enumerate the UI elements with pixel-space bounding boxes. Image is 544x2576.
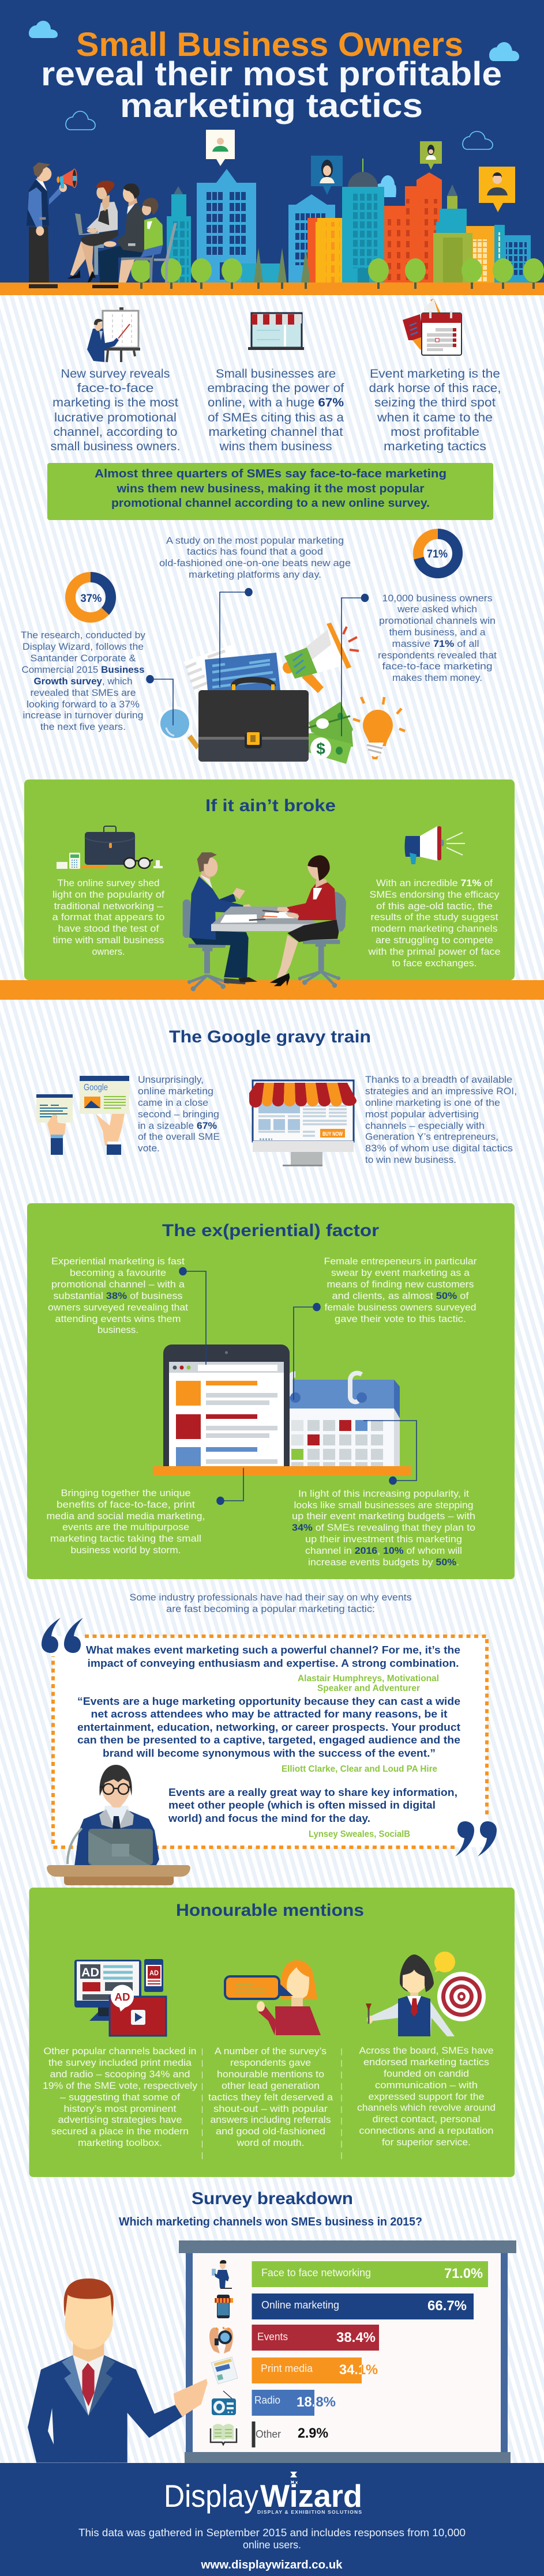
icon: hands with camera xyxy=(209,2327,233,2353)
text: experiential note: substantial 38% of business xyxy=(53,1291,182,1301)
text: research note: The research, conducted by xyxy=(21,630,146,641)
text: research note: Commercial 2015 Business xyxy=(21,665,144,675)
bar: face to face networking xyxy=(252,2261,488,2287)
icon: hand holding Google page xyxy=(80,1076,129,1155)
text: column 3 xyxy=(369,367,501,453)
panel: industry quotes xyxy=(42,1618,497,1885)
text: column 3: most profitable xyxy=(391,425,479,439)
text: right note: of this age-old tactic, the xyxy=(376,901,493,912)
quote 3: meet other people (which is often missed in digital xyxy=(168,1799,436,1811)
quote 2: can then be presented to a captive, targeted, engaged audience and the xyxy=(77,1734,460,1746)
quote 2: entertainment, education, networking, or career prospects. Your product xyxy=(77,1721,460,1733)
audience and speaker illustration xyxy=(27,163,177,292)
text: budget note: looks like small businesses are stepping xyxy=(294,1500,473,1511)
icon: woman with speech bubble xyxy=(225,1960,321,2035)
intro column 2 xyxy=(208,313,344,453)
text: left note: time with small business xyxy=(53,935,164,946)
text: online marketing note: Unsurprisingly, xyxy=(138,1075,204,1085)
bar: radio: Radio xyxy=(254,2394,280,2406)
speech bubble: blue profile xyxy=(311,156,343,195)
icon: megaphone xyxy=(405,826,465,864)
text: multipurpose note: events are the multipurpose xyxy=(62,1522,189,1532)
heading: The ex(periential) factor xyxy=(162,1221,379,1240)
text: multipurpose note: Bringing together the unique xyxy=(61,1488,190,1498)
icon: woman with target xyxy=(366,1952,486,2036)
text: quotes intro xyxy=(129,1592,412,1614)
icon: open book xyxy=(211,2424,237,2445)
connector: owners to banknotes xyxy=(342,594,368,736)
connector: shelf to multipurpose note xyxy=(217,1468,243,1505)
right teal and blue buildings xyxy=(494,225,531,283)
text: column 1: small business owners. xyxy=(51,440,180,453)
icon: advertising screens: AD xyxy=(81,1966,99,1979)
text: channels note: the survey included print media xyxy=(48,2058,192,2068)
quote 1: Alastair Humphreys, Motivational xyxy=(298,1674,439,1684)
text: data source: online users. xyxy=(243,2539,301,2551)
text: budget note: up their investment this marketing xyxy=(305,1534,462,1545)
text: candid communication note: Across the board, SMEs have xyxy=(359,2046,494,2056)
green summary banner: wins them new business, making it the most popular xyxy=(116,482,425,495)
icon: advertising screens: AD xyxy=(114,1991,130,2003)
icon: man with phone xyxy=(212,2260,232,2289)
title: Small Business Owners xyxy=(76,26,463,63)
logo: DISPLAY & EXHIBITION SOLUTIONS xyxy=(257,2509,362,2515)
bar chart: marketing channels xyxy=(252,2261,488,2447)
text: 10,000 owners note: massive 71% of all xyxy=(392,639,479,649)
text: multipurpose note: marketing tactic taking the small xyxy=(50,1534,201,1544)
text: 10,000 owners note xyxy=(378,593,497,683)
icon: shop phone xyxy=(215,2295,233,2318)
text: multipurpose note: business world by storm. xyxy=(70,1545,181,1556)
bar: events: Events xyxy=(257,2331,288,2342)
text: advertising note: most popular advertising xyxy=(365,1109,479,1120)
text: research note: Display Wizard, follows the xyxy=(22,642,144,652)
icon: blue document xyxy=(205,653,280,690)
text: experiential note: promotional channel – with a xyxy=(51,1279,185,1290)
text: candid communication note: channels which revolve around xyxy=(357,2103,496,2113)
bar: print media xyxy=(252,2357,378,2383)
illustration: tablet xyxy=(163,1345,290,1466)
logo: Display xyxy=(164,2478,258,2514)
text: experiential note: owners surveyed revealing that xyxy=(48,1302,188,1313)
text: candid communication note: endorsed marketing tactics xyxy=(363,2057,489,2067)
icon: advertising screens xyxy=(74,1959,166,2036)
text: study intro: tactics has found that a good xyxy=(187,547,323,557)
text: study intro: old-fashioned one-on-one beats new age xyxy=(159,558,351,568)
logo xyxy=(164,2472,362,2515)
text: website: www.displaywizard.co.uk xyxy=(200,2559,343,2571)
bar: print media: 34.1% xyxy=(339,2362,378,2378)
text: online marketing note xyxy=(138,1075,220,1154)
text: column 3: Event marketing is the xyxy=(370,367,500,381)
donut chart 37% xyxy=(70,577,111,617)
text: word of mouth note: answers including referrals xyxy=(210,2115,331,2125)
bar: radio: 18.8% xyxy=(297,2394,336,2410)
text: column 1: New survey reveals xyxy=(61,367,170,381)
city skyline xyxy=(131,159,544,289)
text: word of mouth note: shout-out – with popular xyxy=(213,2104,328,2114)
text: 10,000 owners note: them business, and a xyxy=(389,627,486,638)
quote 1: What makes event marketing such a powerful channel? For me, it’s the xyxy=(86,1644,460,1656)
text: word of mouth note: tactics they felt deserved a xyxy=(208,2092,333,2103)
text: left note: The online survey shed xyxy=(58,878,159,888)
text: column 3: marketing tactics xyxy=(384,440,486,453)
icon: hand holding Google page: Google xyxy=(84,1083,108,1093)
quote 2: “Events are a huge marketing opportunity because they can cast a wide xyxy=(77,1695,460,1707)
intro column 1 xyxy=(51,307,180,453)
text: multipurpose note: benefits of face-to-face, print xyxy=(57,1500,195,1510)
text: research note: Santander Corporate & xyxy=(30,653,136,664)
text: channels note xyxy=(43,2046,198,2148)
closing quotation mark xyxy=(455,1821,497,1856)
man in grey jacket xyxy=(91,183,145,289)
section: the Google gravy train xyxy=(36,1027,517,1166)
text: advertising note: strategies and an impressive ROI, xyxy=(365,1086,517,1097)
text: channels note: history’s most prominent xyxy=(63,2104,177,2114)
illustration: presenter pointing at board xyxy=(28,2279,208,2463)
text: budget note: increase events budgets by 50%. xyxy=(308,1557,459,1568)
teal mid building xyxy=(436,209,467,236)
speech bubble: green profile xyxy=(420,141,442,170)
icon: radio xyxy=(212,2391,236,2415)
bar: events: 38.4% xyxy=(336,2330,376,2345)
text: multipurpose note: media and social media marketing, xyxy=(46,1511,205,1522)
text: experiential note: Experiential marketing is fast xyxy=(51,1256,185,1267)
text: column 1: marketing is the most xyxy=(52,396,178,409)
text: candid communication note: communication – with xyxy=(375,2080,478,2091)
text: right note: modern marketing channels xyxy=(372,924,497,934)
text: research note: revealed that SMEs are xyxy=(30,688,136,698)
olive building xyxy=(433,233,472,287)
icon: light bulb xyxy=(353,697,405,759)
icon: white paper xyxy=(183,644,241,690)
text: female entrepreneurs note: gave their vote to this tactic. xyxy=(335,1314,466,1324)
man in blue suit xyxy=(183,852,257,991)
text: 10,000 owners note: were asked which xyxy=(397,604,477,615)
icon: online shop laptop xyxy=(248,313,304,350)
text: right note: With an incredible 71% of xyxy=(376,878,493,888)
quote 3: world) and focus the mind for the day. xyxy=(168,1812,370,1824)
heading: Survey breakdown xyxy=(192,2189,353,2208)
text: column 3: dark horse of this race, xyxy=(369,382,501,395)
text: female entrepreneurs note: female business owners surveyed xyxy=(324,1302,477,1313)
quote 3: Lynsey Sweales, SocialB xyxy=(309,1829,410,1839)
tree trunks and shoes on strip xyxy=(29,283,535,289)
heading: Honourable mentions xyxy=(176,1901,364,1920)
intro column 3 xyxy=(369,299,501,453)
teal domed building xyxy=(342,159,384,283)
text: online marketing note: online marketing xyxy=(138,1086,213,1097)
text: candid communication note xyxy=(357,2046,496,2148)
briefcase illustration xyxy=(158,623,405,764)
text: word of mouth note: A number of the survey’s xyxy=(215,2046,327,2057)
text: channels note: marketing toolbox. xyxy=(78,2138,162,2148)
text: column 2: wins them business xyxy=(219,440,332,453)
text: budget note xyxy=(292,1489,475,1568)
illustration: two business people meeting xyxy=(183,852,346,991)
icon: filled cloud top left xyxy=(29,21,58,38)
logo: Wizard xyxy=(260,2478,362,2514)
illustration: calendar xyxy=(290,1373,400,1466)
woman with laptop xyxy=(67,180,118,283)
icon: cloud behind dome xyxy=(375,175,396,197)
man with megaphone xyxy=(27,163,77,289)
bar: print media: 34.1% xyxy=(339,2362,378,2378)
text: data source: This data was gathered in September 2015 and includes responses from 10,000 xyxy=(78,2526,466,2539)
text: word of mouth note: respondents gave xyxy=(230,2058,311,2068)
icon: presenter at board xyxy=(87,307,140,362)
text: budget note: channel in 2016, 10% of whom will xyxy=(305,1546,462,1556)
quote 2 xyxy=(77,1695,460,1774)
bar: face to face networking: Face to face networking xyxy=(261,2267,371,2279)
bar: radio xyxy=(252,2390,336,2416)
text: 10,000 owners note: 10,000 business owners xyxy=(382,593,493,604)
heading: The Google gravy train xyxy=(169,1027,371,1046)
quote 3 xyxy=(168,1786,457,1839)
tall blue building xyxy=(197,169,256,283)
text: word of mouth note: honourable mentions to xyxy=(217,2069,324,2080)
text: advertising note: Thanks to a breadth of available xyxy=(365,1075,512,1085)
text: female entrepreneurs note xyxy=(324,1256,477,1324)
bar: face to face networking: 71.0% xyxy=(444,2266,483,2281)
display board xyxy=(179,2240,516,2463)
text: research note: Growth survey, which xyxy=(33,676,133,687)
panel: honourable mentions xyxy=(29,1888,515,2177)
text: study intro: A study on the most popular marketing xyxy=(166,536,344,546)
icon: desktop shop page: BUY NOW xyxy=(322,1131,343,1138)
panel: if it ain't broke xyxy=(0,779,544,1000)
left teal tower xyxy=(167,186,191,287)
text: right note: with the primal power of face xyxy=(367,947,501,957)
icon: megaphone xyxy=(283,623,359,693)
icon: outline cloud left xyxy=(66,111,95,130)
text: advertising note: Generation Y’s entrepreneurs, xyxy=(365,1132,498,1142)
trees xyxy=(131,248,544,289)
bar: other: 2.9% xyxy=(298,2426,328,2441)
text: experiential note: becoming a favourite xyxy=(70,1268,166,1278)
connector: research to magnifier xyxy=(147,676,173,725)
text: multipurpose note xyxy=(46,1488,205,1556)
meeting table xyxy=(211,906,317,931)
text: channels note: and radio – scooping 34% and xyxy=(50,2069,190,2080)
icon: advertising screens: AD xyxy=(149,1969,159,1977)
text: research note: looking forward to a 37% xyxy=(27,699,140,710)
text: column 1: lucrative promotional xyxy=(54,411,177,424)
text: column 2: marketing channel that xyxy=(209,425,343,439)
title xyxy=(41,26,502,125)
green summary banner xyxy=(47,463,493,520)
text: research note: increase in turnover during xyxy=(23,710,143,721)
opening quotation mark xyxy=(42,1618,83,1653)
bar: online marketing: 66.7% xyxy=(427,2298,467,2314)
bar: other xyxy=(252,2421,328,2447)
text: word of mouth note: other lead generation xyxy=(222,2081,320,2091)
illustration: speaker at podium xyxy=(47,1765,190,1885)
text: channels note: 19% of the SME vote, respectively xyxy=(43,2081,198,2091)
text: candid communication note: connections and a reputation xyxy=(359,2126,494,2136)
bar: radio: 18.8% xyxy=(297,2394,336,2410)
text: female entrepreneurs note: and clients, as almost 50% of xyxy=(332,1291,469,1301)
text: quotes intro: Some industry professionals have had their say on why events xyxy=(129,1592,412,1603)
orange floor strip xyxy=(0,980,544,1000)
orange buildings xyxy=(384,172,442,287)
text: 10,000 owners note: respondents revealed that xyxy=(378,650,497,661)
text: online marketing note: came in a close xyxy=(138,1098,208,1108)
icon: filled cloud top right xyxy=(489,42,519,61)
text: experiential note xyxy=(48,1256,188,1335)
text: budget note: 34% of SMEs revealing that they plan to xyxy=(292,1523,475,1533)
text: left note: owners. xyxy=(92,947,125,957)
grey spire xyxy=(447,184,457,210)
connector: experiential note to tablet xyxy=(179,1267,206,1365)
icon: briefcase and desk items xyxy=(57,826,163,869)
connector: female note to calendar xyxy=(294,1303,320,1400)
text: study intro xyxy=(159,536,351,580)
text: column 2 xyxy=(208,367,344,453)
text: left note: traditional networking – xyxy=(54,901,163,912)
text: data source xyxy=(78,2526,466,2551)
quote 1 xyxy=(86,1644,460,1693)
text: column 1 xyxy=(51,367,180,453)
text: online marketing note: vote. xyxy=(138,1143,160,1154)
text: research note: the next five years. xyxy=(40,722,126,732)
text: online marketing note: in a sizeable 67% xyxy=(138,1121,217,1131)
blue roofed building xyxy=(288,194,335,283)
text: word of mouth note: and good old-fashioned xyxy=(216,2126,325,2137)
icon: banknotes: $ xyxy=(316,740,325,758)
icon: banknotes xyxy=(309,702,353,764)
text: female entrepreneurs note: Female entrepeneurs in particular xyxy=(324,1256,477,1267)
low teal building xyxy=(241,263,280,284)
icon: desktop shop page xyxy=(249,1080,357,1166)
text: advertising note: online marketing is one of the xyxy=(365,1098,500,1108)
text: column 2: of SMEs citing this as a xyxy=(208,411,344,424)
text: candid communication note: expressed support for the xyxy=(368,2092,485,2102)
icon: outline cloud right xyxy=(463,131,493,149)
text: word of mouth note xyxy=(208,2046,333,2148)
text: candid communication note: founded on candid xyxy=(384,2069,469,2079)
text: channels note: advertising strategies have xyxy=(58,2115,182,2125)
text: online marketing note: of the overall SME xyxy=(138,1132,220,1142)
bar: print media: Print media xyxy=(261,2363,313,2374)
text: study intro: marketing platforms any day. xyxy=(189,570,321,580)
green summary banner: promotional channel according to a new online survey. xyxy=(111,496,430,510)
text: left note: have stood the test of xyxy=(58,924,159,934)
icon: magnifying glass xyxy=(158,706,200,750)
text: column 1: face-to-face xyxy=(77,382,153,395)
quote 2: Elliott Clarke, Clear and Loud PA Hire xyxy=(282,1764,437,1774)
text: quotes intro: are fast becoming a popular marketing tactic: xyxy=(166,1604,375,1614)
text: column 3: seizing the third spot xyxy=(374,396,496,409)
title: marketing tactics xyxy=(120,87,423,125)
bar: online marketing xyxy=(252,2293,474,2319)
text: 10,000 owners note: promotional channels win xyxy=(379,616,496,626)
text: online marketing note: second – bringing xyxy=(138,1109,219,1120)
text: column 3: when it came to the xyxy=(377,411,493,424)
text: column 2: Small businesses are xyxy=(216,367,336,381)
yellow and orange building xyxy=(307,218,342,286)
orange shelf xyxy=(153,1466,411,1475)
text: experiential note: attending events wins them xyxy=(55,1314,181,1324)
text: right note: SMEs endorsing the efficacy xyxy=(369,890,500,900)
text: budget note: In light of this increasing popularity, it xyxy=(298,1489,469,1499)
quote 1: impact of conveying enthusiasm and expertise. A strong combination. xyxy=(88,1657,459,1669)
icon: briefcase xyxy=(198,677,309,762)
woman in green xyxy=(115,198,177,292)
quote 2: net across attendees who may be attracted for many reasons, be it xyxy=(91,1708,448,1720)
text: left note: light on the popularity of xyxy=(52,890,164,900)
text: advertising note: to win new business. xyxy=(365,1155,456,1165)
text: candid communication note: for superior service. xyxy=(382,2137,471,2148)
text: research note xyxy=(21,630,146,732)
text: column 2: online, with a huge 67% xyxy=(208,396,344,409)
connector: study to briefcase xyxy=(220,588,252,687)
text: budget note: up their event marketing budgets – with xyxy=(292,1511,475,1522)
title: reveal their most profitable xyxy=(41,55,502,93)
panel: the experiential factor xyxy=(27,1203,515,1579)
quote 2: brand will become synonymous with the success of the event.” xyxy=(103,1747,436,1759)
text: advertising note: channels – especially with xyxy=(365,1121,485,1131)
text: left note xyxy=(52,878,165,957)
text: right note: are struggling to compete xyxy=(376,935,493,946)
heading: If it ain’t broke xyxy=(205,796,336,815)
orange grid building xyxy=(466,226,495,283)
icon: newspaper xyxy=(211,2357,238,2384)
bar: online marketing: Online marketing xyxy=(261,2299,339,2311)
text: word of mouth note: word of mouth. xyxy=(236,2138,305,2148)
text: column 2: embracing the power of xyxy=(208,382,344,395)
donut chart 37%: 37% xyxy=(81,593,102,605)
connector: calendar to budget note xyxy=(363,1421,417,1484)
text: channels note: – suggesting that some of xyxy=(60,2092,180,2103)
orange ground strip xyxy=(0,283,544,295)
speech bubble: white profile xyxy=(206,130,235,166)
icon: calendar and megaphone xyxy=(403,299,462,355)
green summary banner: Almost three quarters of SMEs say face-to-face marketing xyxy=(95,467,447,480)
donut chart 71%: 71% xyxy=(427,548,448,560)
subheading: Which marketing channels won SMEs business in 2015? xyxy=(119,2215,422,2228)
text: 10,000 owners note: makes them money. xyxy=(392,673,482,683)
footer xyxy=(0,2463,544,2576)
text: candid communication note: direct contact, personal xyxy=(373,2114,480,2125)
quote 1: Speaker and Adventurer xyxy=(317,1684,420,1693)
text: channels note: secured a place in the modern xyxy=(51,2126,189,2137)
woman in red jacket xyxy=(270,855,346,988)
text: female entrepreneurs note: means of finding new customers xyxy=(327,1279,474,1290)
text: right note: results of the study suggest xyxy=(370,912,498,922)
icon: hand holding page xyxy=(36,1094,73,1155)
section: survey breakdown xyxy=(28,2189,516,2463)
speech bubble: yellow profile xyxy=(479,167,515,212)
text: channels note: Other popular channels backed in xyxy=(44,2046,196,2057)
bar: events xyxy=(252,2325,379,2351)
text: advertising note xyxy=(365,1075,517,1165)
text: column 1: channel, according to xyxy=(53,425,178,439)
text: female entrepreneurs note: swear by event marketing as a xyxy=(331,1268,470,1278)
donut chart 71% xyxy=(418,534,457,573)
text: advertising note: 83% of whom use digital tactics xyxy=(365,1143,513,1154)
text: 10,000 owners note: face-to-face marketing xyxy=(382,661,493,672)
header panel xyxy=(0,0,544,292)
text: left note: a format that appears to xyxy=(52,912,165,922)
quote 3: Events are a really great way to share key information, xyxy=(168,1786,457,1798)
bar: other: Other xyxy=(256,2428,281,2440)
text: experiential note: business. xyxy=(97,1325,138,1335)
text: right note xyxy=(367,878,501,969)
text: right note: to face exchanges. xyxy=(392,958,477,969)
